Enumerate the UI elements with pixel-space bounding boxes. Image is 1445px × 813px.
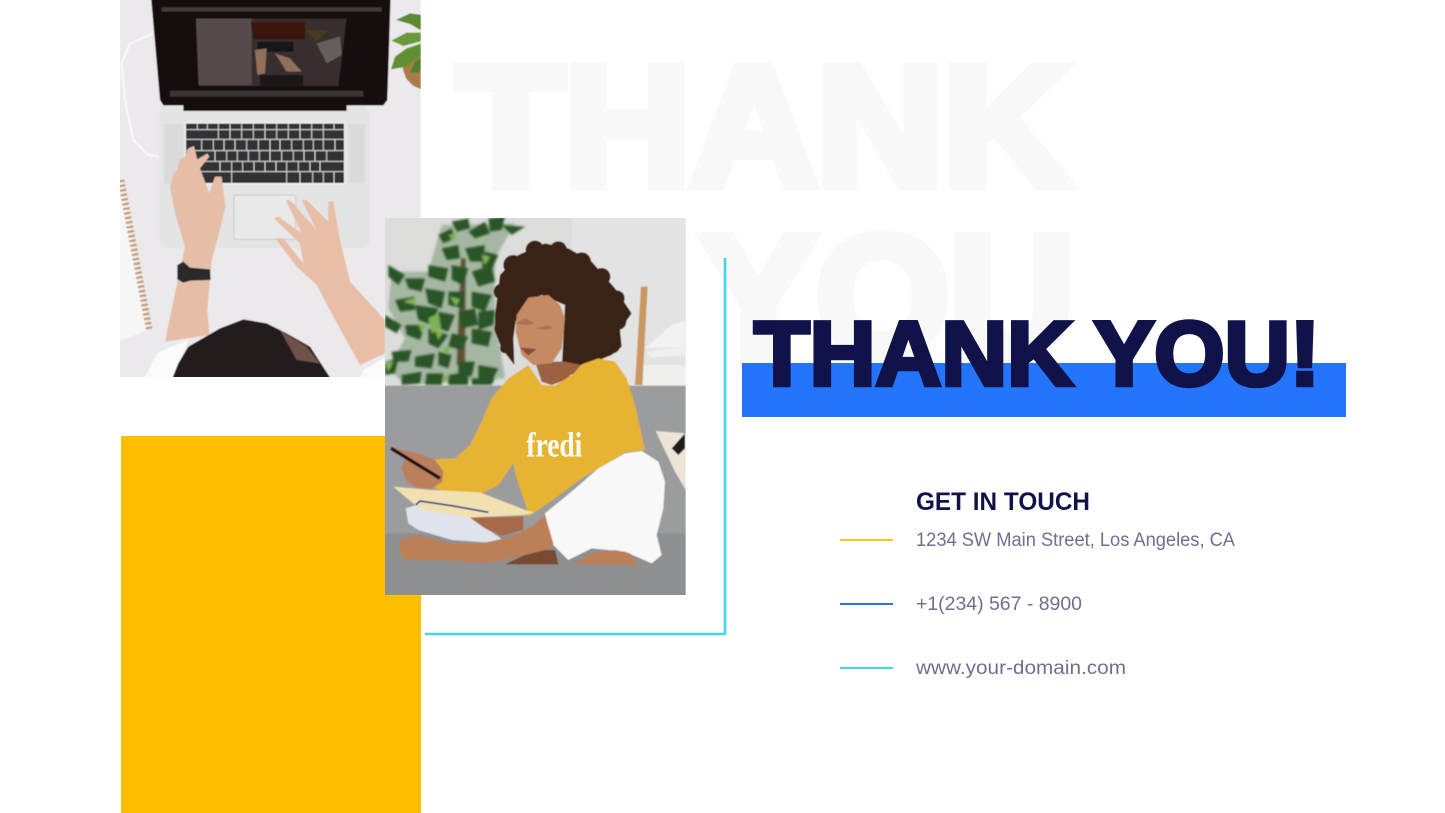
- heading: get in touch: GET IN TOUCH: [916, 488, 1090, 516]
- title: [754, 304, 1320, 405]
- notebook: [118, 180, 149, 342]
- blue highlight bar: [742, 363, 1346, 417]
- logo on sweatshirt: fredi: [526, 426, 583, 464]
- hair: [494, 241, 632, 375]
- contact: address: 1234 SW Main Street, Los Angeles, CA: [916, 530, 1235, 551]
- hand under notebook: [470, 517, 523, 536]
- background ghost text: THANK YOU: YOU: [701, 202, 1074, 392]
- open notebook: [393, 487, 534, 518]
- plant: [391, 13, 423, 90]
- title: YOU!: [1094, 304, 1320, 405]
- contact: phone: +1(234) 567 - 8900: [916, 594, 1082, 615]
- white trousers: [406, 504, 503, 542]
- hands and watch: [165, 146, 385, 365]
- wooden rack: [635, 287, 687, 387]
- woman: [388, 241, 665, 565]
- plant: [385, 217, 525, 385]
- yellow block: [121, 436, 421, 813]
- contact: website: www.your-domain.com: [915, 658, 1126, 679]
- background ghost text: THANK YOU: THANK: [457, 32, 1070, 222]
- sofa: [382, 386, 688, 598]
- cyan L-shaped frame line: [425, 258, 725, 634]
- photo: hands typing on a laptop: [117, 0, 423, 380]
- sweatshirt: [434, 358, 645, 517]
- title: THANK: [754, 304, 1073, 405]
- laptop: [151, 0, 391, 248]
- legs and feet: [505, 550, 558, 564]
- photo: woman with notebook on sofa: [382, 215, 688, 598]
- pen hand: [388, 446, 443, 488]
- background ghost text: THANK YOU: [457, 32, 1074, 392]
- head and shirt: [143, 319, 385, 380]
